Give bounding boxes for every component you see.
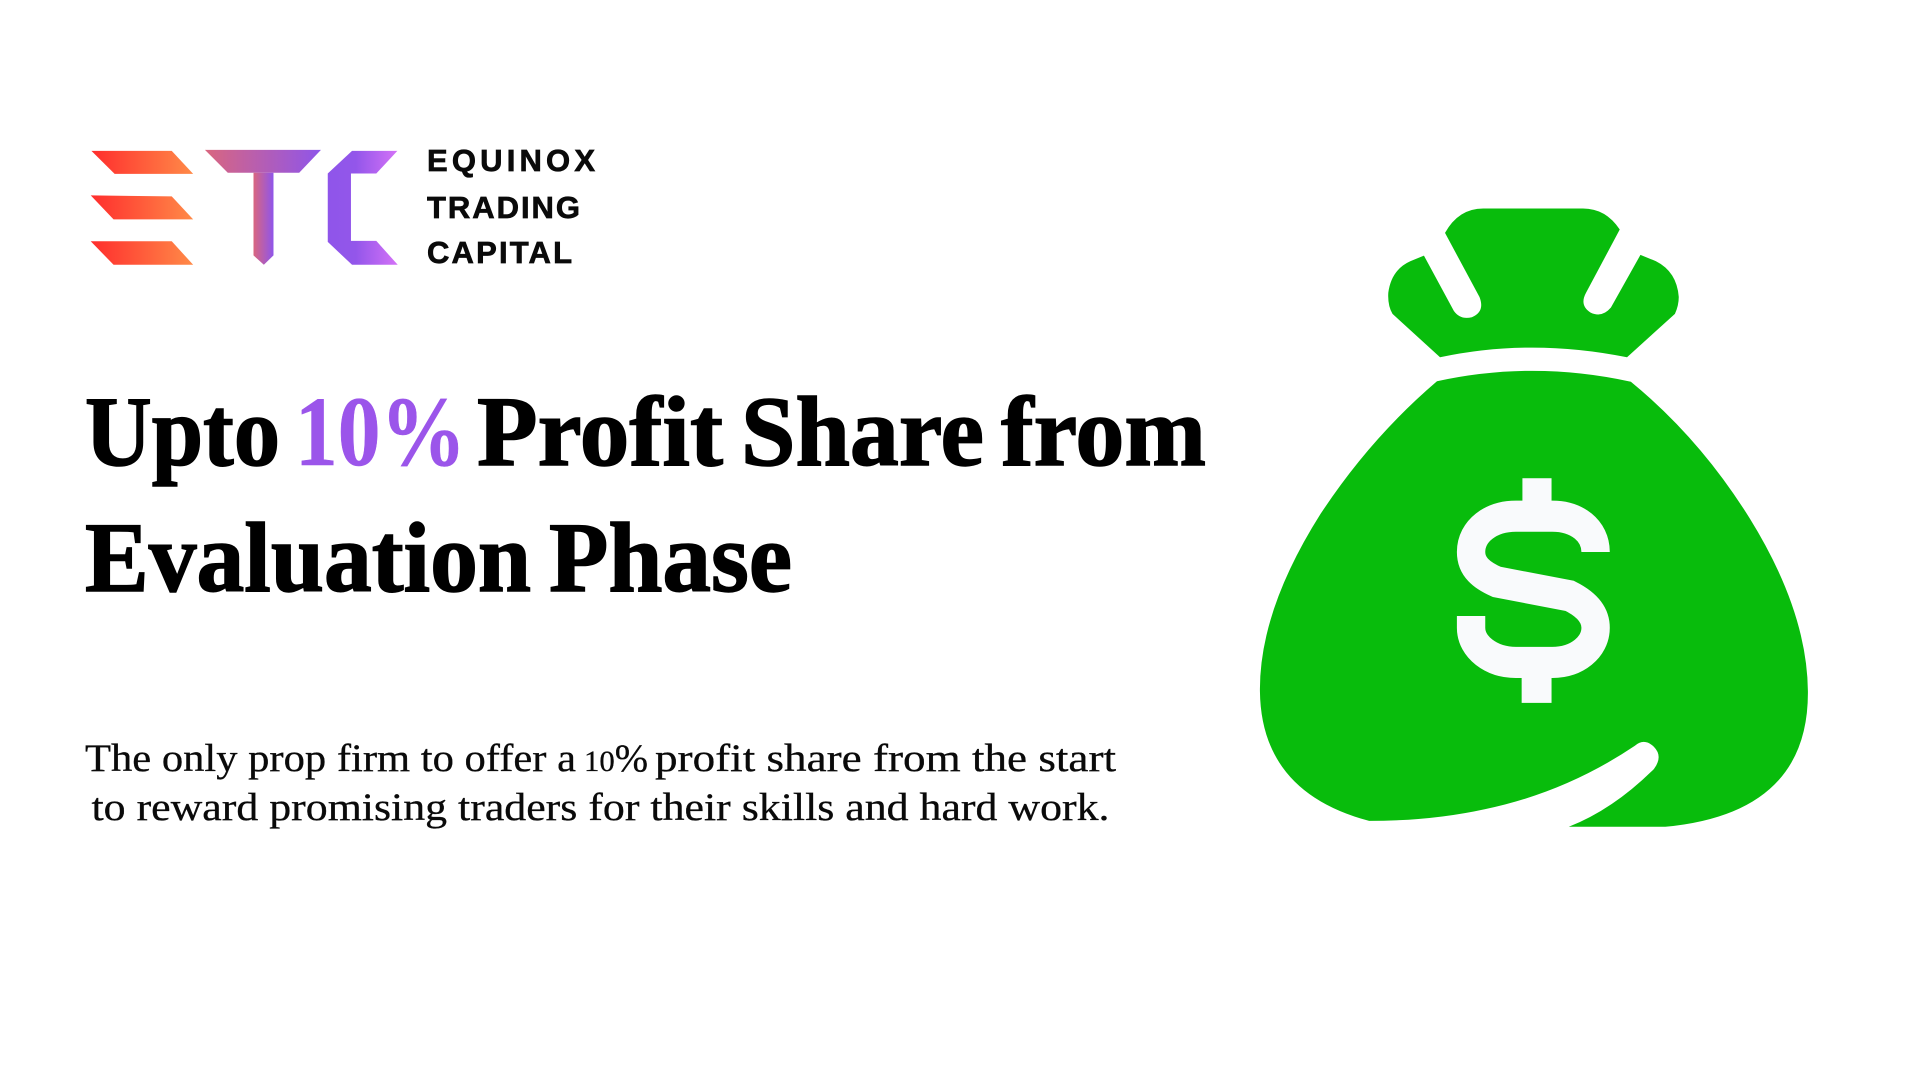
title line 1: 10% bbox=[295, 376, 466, 487]
title line 1: from bbox=[1001, 376, 1206, 487]
description line 2: to reward promising traders for their skills and hard work. bbox=[92, 786, 1110, 829]
title line 2: Evaluation bbox=[85, 502, 531, 613]
logo wordmark bbox=[427, 143, 595, 270]
title bbox=[85, 376, 1206, 613]
title line 1: Upto bbox=[85, 376, 280, 487]
logo letter E bbox=[91, 151, 193, 265]
title line 2: Phase bbox=[549, 502, 792, 613]
logo wordmark: TRADING bbox=[427, 190, 580, 225]
title line 1: Profit bbox=[477, 376, 723, 487]
logo letter T bbox=[205, 150, 321, 265]
title line 2 bbox=[85, 502, 792, 613]
title line 1 bbox=[85, 376, 1206, 487]
dollar sign bbox=[1471, 478, 1596, 703]
logo letter C bbox=[328, 151, 398, 265]
description line 1: The only prop firm to offer a bbox=[85, 737, 576, 780]
logo: Equinox Trading Capital bbox=[91, 143, 595, 270]
bag knot bbox=[1388, 208, 1679, 357]
title line 1: Share bbox=[741, 376, 984, 487]
description text bbox=[85, 737, 1116, 829]
logo wordmark: EQUINOX bbox=[427, 143, 595, 178]
icon: money bag bbox=[1260, 208, 1808, 827]
description line 1: profit share from the start bbox=[655, 737, 1116, 780]
description line 1 bbox=[85, 737, 1116, 780]
description line 1: 10% bbox=[584, 737, 648, 780]
logo mark: ETC bbox=[91, 150, 398, 265]
bag body bbox=[1260, 371, 1808, 827]
logo wordmark: CAPITAL bbox=[427, 235, 572, 270]
